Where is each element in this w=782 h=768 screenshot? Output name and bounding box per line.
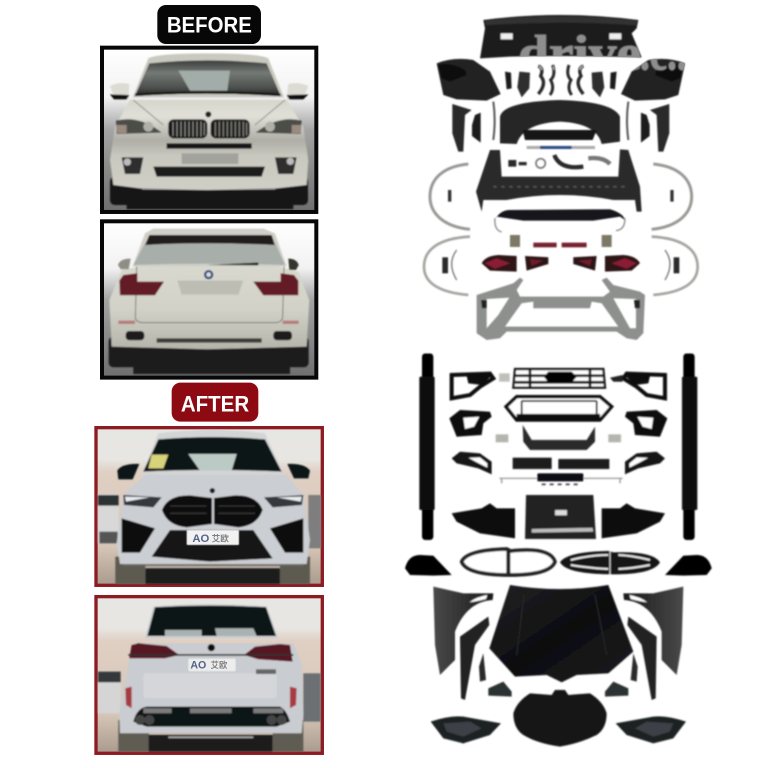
watermark text <box>518 24 687 80</box>
front body kit parts <box>405 353 712 747</box>
watermark text: drive <box>518 24 641 80</box>
part: hood <box>489 585 633 682</box>
part: trim bar <box>527 146 595 149</box>
part: rear bumper <box>476 149 642 212</box>
photo: after, rear of car: 艾欧 <box>211 660 228 670</box>
photo: before, front of car <box>102 48 316 212</box>
part: black grille <box>560 551 660 574</box>
part: diffuser <box>495 209 625 232</box>
part: reflector strips <box>533 243 587 247</box>
part: trim panels <box>513 458 609 469</box>
part: small fittings and hoses <box>508 155 610 168</box>
photo: after, front of car: AO <box>192 533 210 545</box>
part: thin center trim <box>499 473 623 484</box>
part: left side skirt, fenders, mirror and headlight <box>405 353 515 743</box>
badge: AFTER: AFTER <box>181 391 249 416</box>
rear body kit parts <box>424 15 698 340</box>
part: rear spoiler <box>500 100 620 144</box>
badge: BEFORE <box>157 5 261 44</box>
part: left inner panels and trim <box>424 59 554 295</box>
part: center bracket <box>523 425 595 450</box>
part: bare grille frame <box>462 549 555 575</box>
part: under-tray <box>525 495 596 539</box>
part: right side skirt, fenders, mirror and headlight <box>602 353 712 743</box>
photo: before, rear of car <box>102 221 316 378</box>
left column: before and after photos <box>96 5 322 753</box>
part: lower grille <box>506 397 612 420</box>
part: front bumper <box>477 278 645 340</box>
photo: after, front of car: 艾欧 <box>212 532 229 543</box>
badge: BEFORE: BEFORE <box>167 13 252 38</box>
watermark text: .c.. <box>640 24 687 80</box>
part: engine shield <box>513 690 607 747</box>
photo: after, rear of car <box>96 597 322 753</box>
part: right inner panels and trim <box>568 59 698 295</box>
photo: after, rear of car: AO <box>190 660 206 672</box>
photo: after, front of car <box>96 428 322 585</box>
part: trunk lid <box>480 15 642 58</box>
part: upper grille <box>499 369 623 388</box>
badge: AFTER <box>172 383 258 422</box>
